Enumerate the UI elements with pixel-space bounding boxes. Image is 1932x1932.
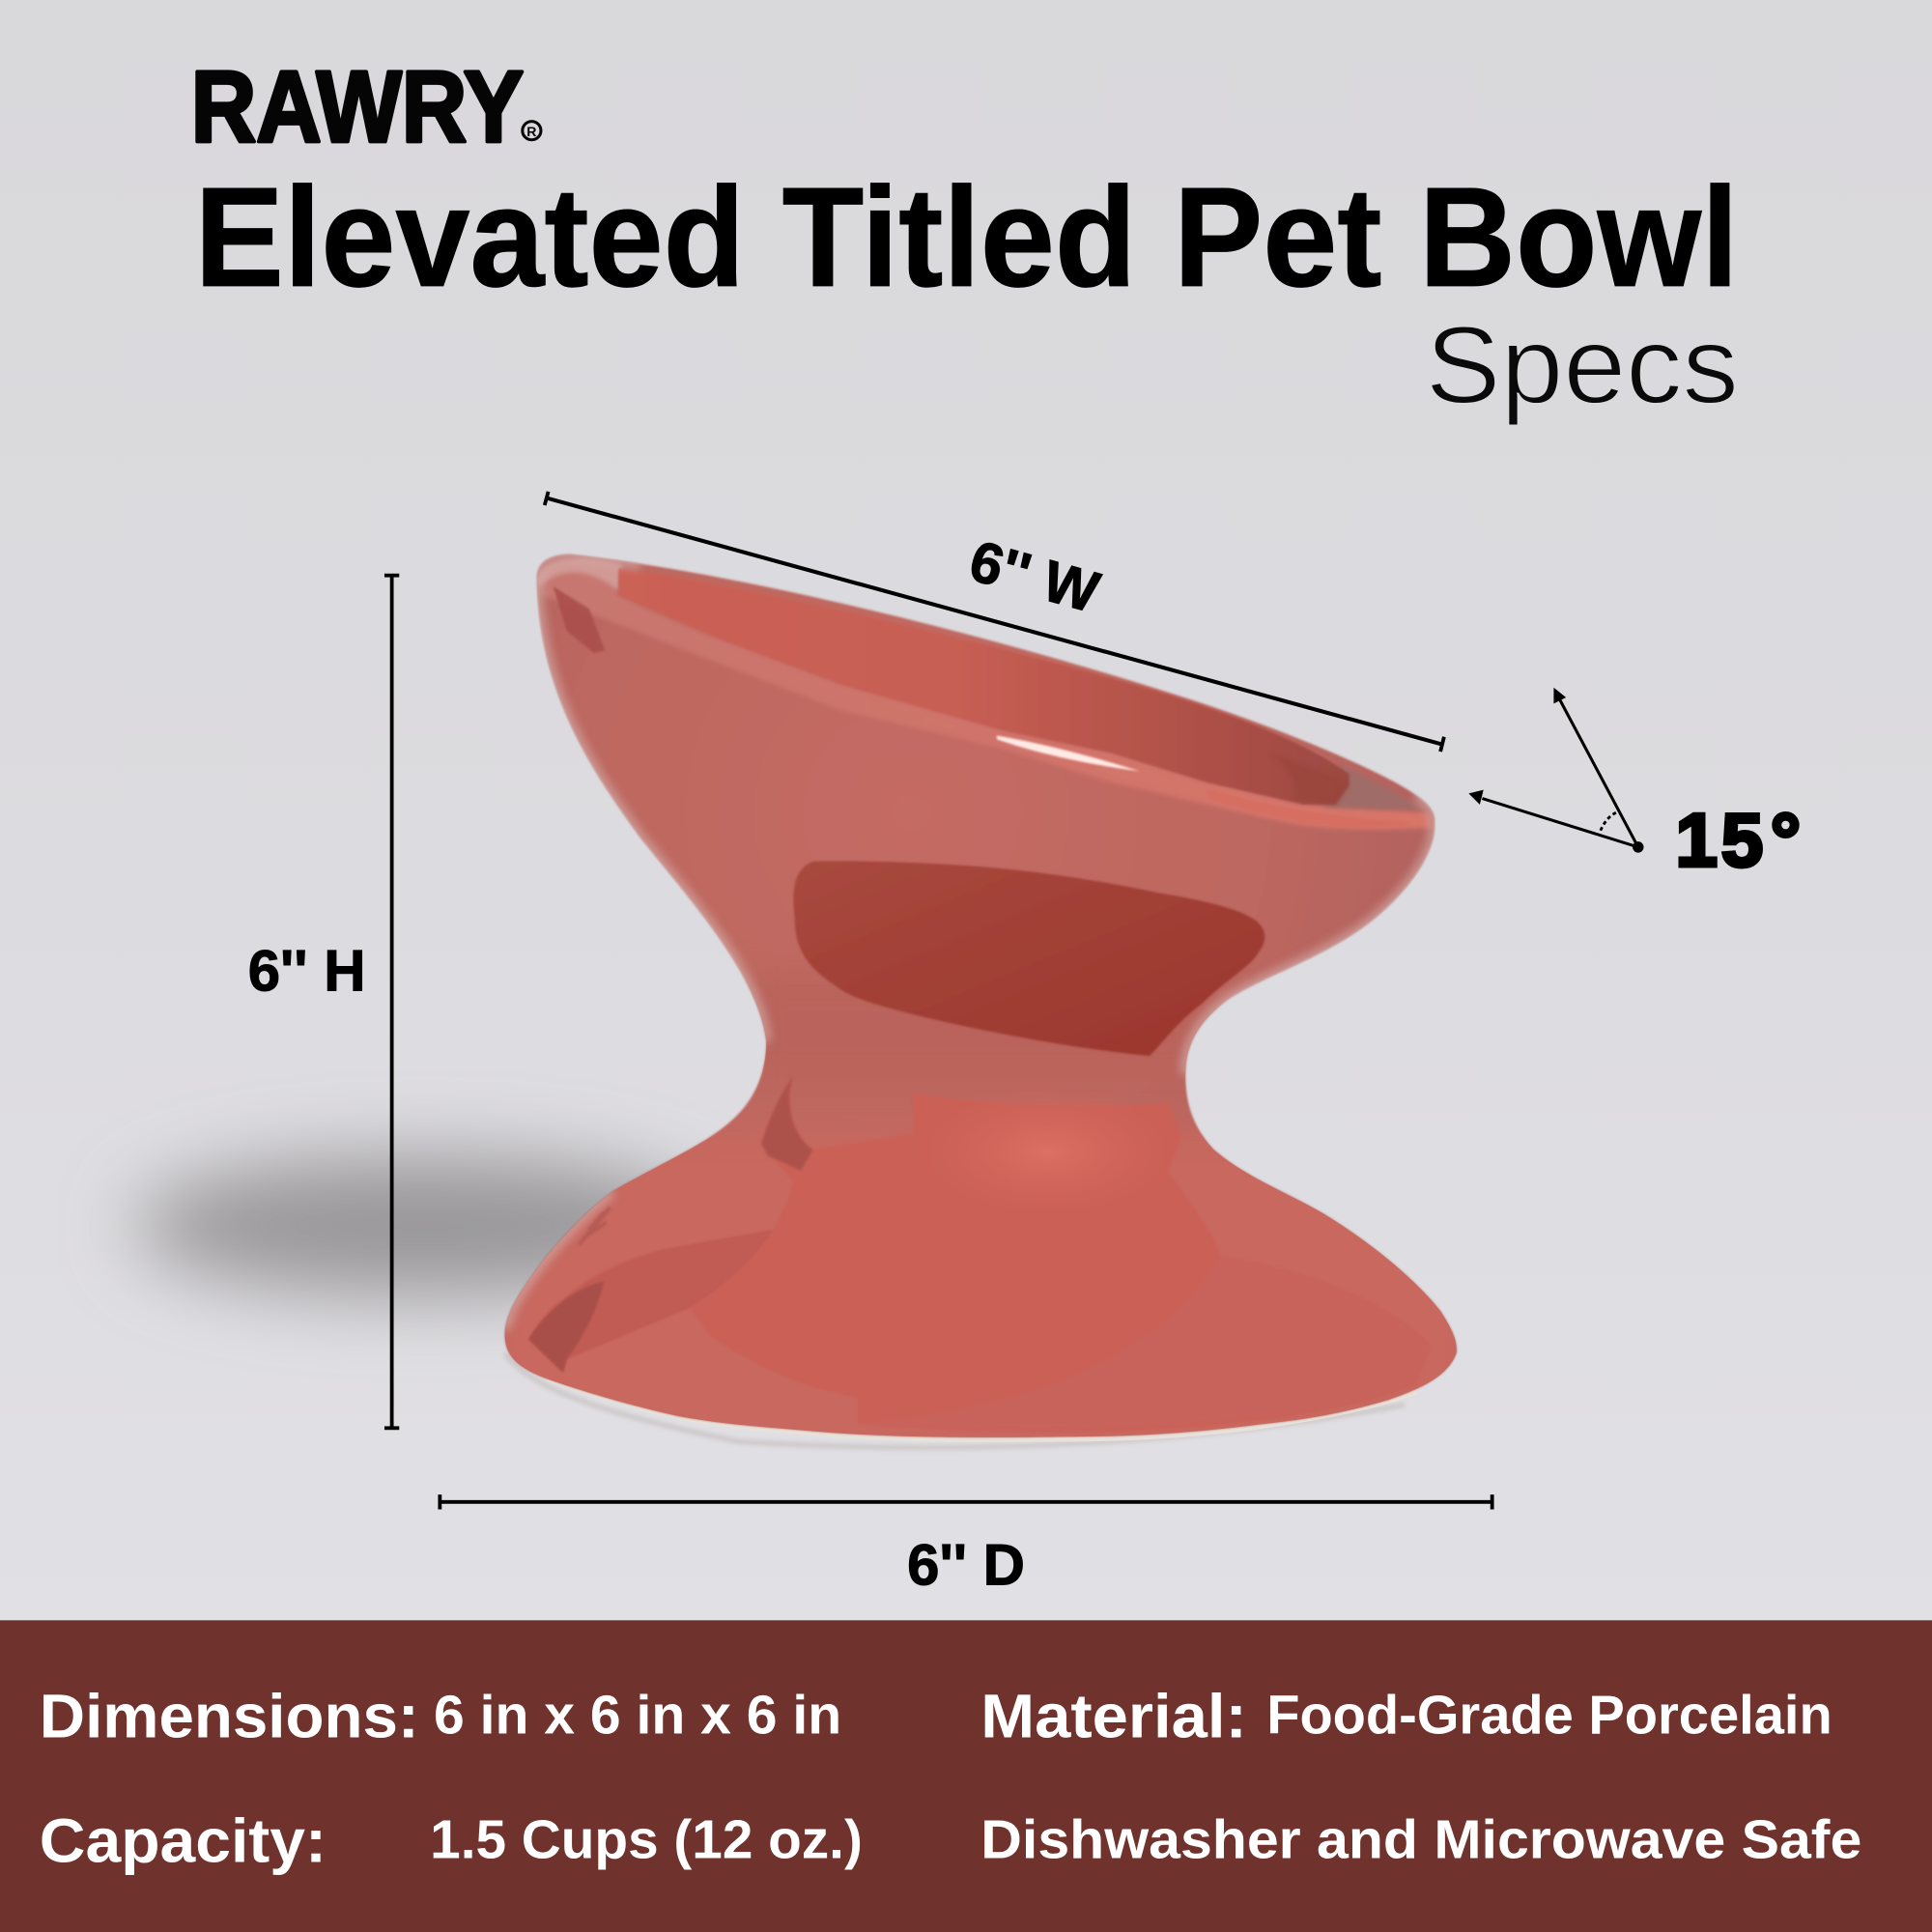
bowl: surface details <box>480 554 1479 1472</box>
bowl: body <box>505 554 1457 1437</box>
reflection: central glow <box>995 1126 1099 1179</box>
dimension label: height: 6'' H <box>248 939 365 1004</box>
reflection: central glossy area <box>693 1094 1217 1422</box>
spec: capacity label: Capacity: <box>40 1805 327 1875</box>
angle label: 15° <box>1676 800 1801 883</box>
inner bowl far-side shade <box>1293 767 1349 806</box>
spec: material label: Material: <box>980 1681 1247 1750</box>
reflection: upper left patch <box>554 586 605 653</box>
dimension label: depth: 6'' D <box>907 1532 1025 1597</box>
pale glazed edge <box>505 554 1435 1329</box>
spec: dimensions value: 6 in x 6 in x 6 in <box>434 1685 841 1746</box>
dimension label: width: 6'' W <box>963 528 1106 625</box>
rim far-left pale lip <box>537 557 622 591</box>
spec: material value: Food-Grade Porcelain <box>1266 1685 1833 1746</box>
arrow: upper ray <box>1553 688 1638 847</box>
bowl illustration <box>480 554 1479 1472</box>
rim band <box>538 563 1433 830</box>
reflection: neck sliver <box>761 1076 813 1171</box>
rim far-right grey lip <box>1324 764 1422 810</box>
dimension: depth line <box>440 1494 1492 1509</box>
neck tone <box>746 974 1213 1084</box>
embossed logo on the bowl <box>579 1208 610 1244</box>
spec: dimensions label: Dimensions: <box>40 1681 419 1750</box>
dimension: height line <box>384 576 399 1428</box>
subtitle: Specs <box>1426 304 1739 427</box>
reflection: lower band <box>570 1232 771 1356</box>
panel: specifications bar <box>0 1620 1932 1932</box>
inner bowl <box>618 568 1350 805</box>
dimension: width line <box>545 492 1444 752</box>
angle diagram <box>1468 688 1644 853</box>
reflection: bottom right dome <box>863 1256 1431 1430</box>
vertex dot <box>1633 841 1644 853</box>
spec: care note: Dishwasher and Microwave Safe <box>980 1808 1861 1869</box>
base glaze tone <box>480 1127 1479 1472</box>
arrow: lower ray <box>1468 790 1638 847</box>
rim salmon stripe <box>1208 788 1412 827</box>
title: Elevated Titled Pet Bowl <box>195 158 1739 317</box>
spec: capacity value: 1.5 Cups (12 oz.) <box>430 1808 863 1869</box>
angle arc <box>1601 812 1618 831</box>
shadow: contact shadow under the base <box>505 1353 1405 1447</box>
reflection: dark window <box>793 861 1264 1056</box>
logo: Rawry: R <box>526 124 536 139</box>
bowl: unglazed base edge <box>542 1368 1417 1442</box>
reflection: lower left dark strip <box>528 1282 604 1373</box>
logo: Rawry: RAWRY <box>191 51 524 164</box>
shadow: bowl cast shadow <box>135 1157 715 1295</box>
specular highlight <box>997 735 1140 771</box>
